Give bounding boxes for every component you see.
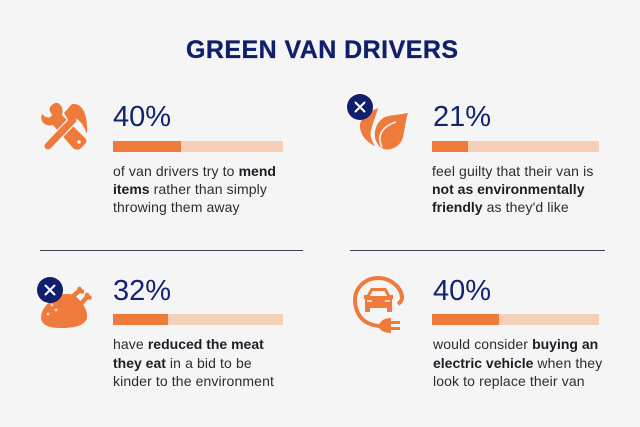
text: guilt: feel guilty that their van is: [432, 163, 593, 179]
text: guilt: as they'd like: [483, 199, 569, 215]
text: electric vehicle: look to replace their van: [433, 373, 585, 389]
text: electric vehicle: buying an: [532, 336, 598, 352]
text: electric vehicle: when they: [533, 355, 602, 371]
text: meat: they eat: [113, 355, 166, 371]
panel: electric vehicle: [355, 275, 602, 389]
text: mend items: rather than simply: [150, 181, 267, 197]
text: electric vehicle: would consider: [432, 336, 532, 352]
icon: leaf with cross: [347, 94, 408, 149]
stat: 21%: 21%: [433, 101, 491, 133]
text: mend items: items: [113, 181, 150, 197]
stat: 40%: 40%: [433, 275, 491, 307]
text: meat: reduced the meat: [148, 336, 264, 352]
progress bar: 21%: [432, 141, 599, 152]
icon: wrench and hammer: [41, 103, 87, 150]
title: GREEN VAN DRIVERS: [186, 36, 458, 64]
stat: 40%: 40%: [113, 101, 171, 133]
icon: electric car and plug: [355, 278, 402, 333]
icon: roast chicken with cross: [37, 277, 92, 328]
text: electric vehicle: electric vehicle: [433, 355, 534, 371]
text: guilt: friendly: [432, 199, 483, 215]
progress bar: 40%: [113, 141, 283, 152]
text: meat: have: [113, 336, 148, 352]
panel: environmentally friendly guilt: [347, 94, 599, 215]
text: mend items: of van drivers try to: [113, 163, 239, 179]
text: mend items: mend: [239, 163, 276, 179]
progress bar: 40%: [432, 314, 599, 325]
progress bar: 32%: [113, 314, 283, 325]
panel: mending items: [41, 101, 283, 215]
panel: reduced meat: [37, 275, 283, 389]
text: mend items: throwing them away: [113, 199, 240, 215]
stat: 32%: 32%: [113, 275, 171, 307]
text: meat: kinder to the environment: [113, 373, 274, 389]
text: guilt: not as environmentally: [432, 181, 585, 197]
text: meat: in a bid to be: [166, 355, 252, 371]
